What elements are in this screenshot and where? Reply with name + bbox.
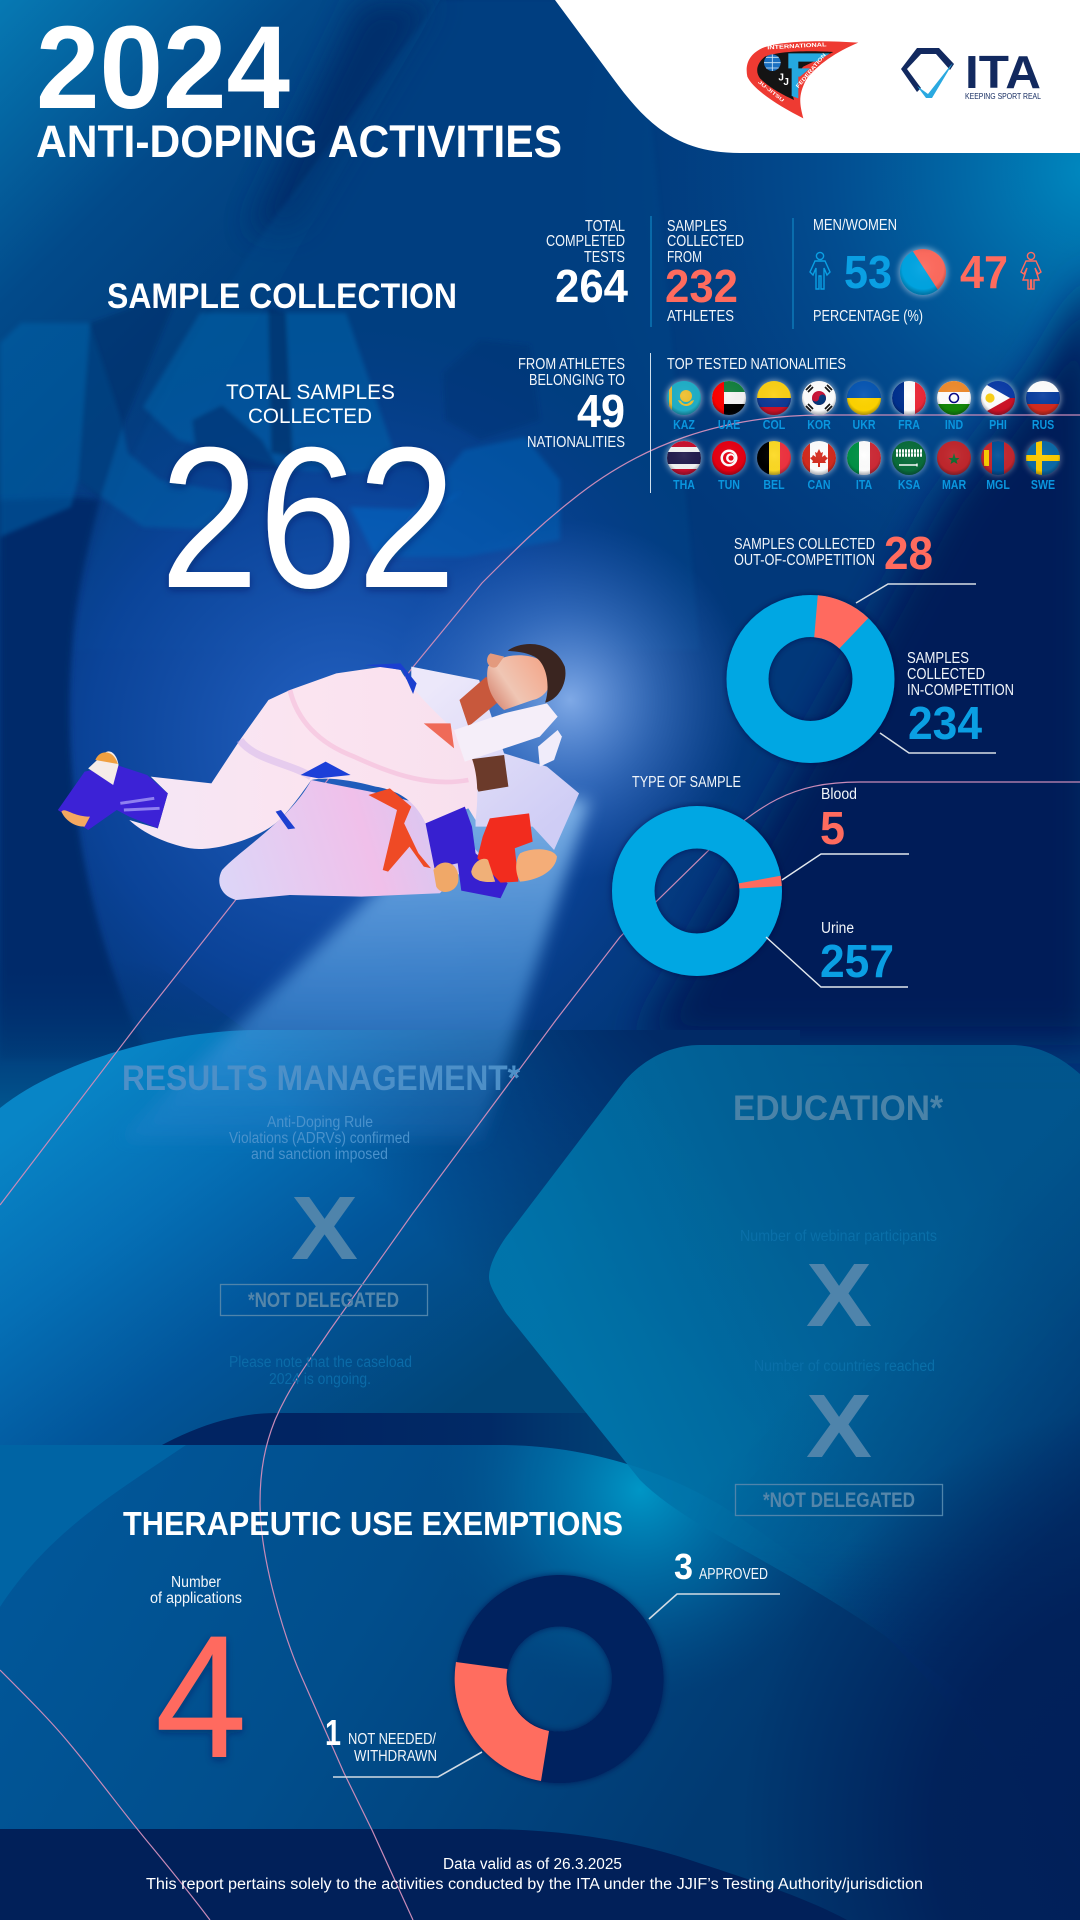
stat: nationalities: NATIONALITIES [527,434,625,451]
logo: JJIF: J [778,73,784,84]
chart: TUE outcomes donut [325,1546,780,1781]
footer note: This report pertains solely to the activities conducted by the ITA under the JJIF’s Testing Authority/jurisdiction [146,1876,923,1893]
icon: woman [1021,252,1041,289]
flag: TUN: TUN [718,478,740,492]
stat: total completed tests [546,218,628,312]
panel: results management background [0,1030,800,1500]
label: samples in competition [907,650,1014,749]
panel: results management: Anti-Doping Rule [267,1114,373,1131]
flag: MAR: MAR [942,478,967,492]
logo: JJIF: FEDERATION [795,52,828,90]
stat: men and women percentage [810,217,1041,325]
logo: JJIF: JU-JITSU [757,80,786,104]
footer note [146,1856,923,1893]
logo: ITA: ITA [965,46,1041,98]
panel: results management: X [291,1179,358,1279]
heading: sample collection: SAMPLE COLLECTION [107,277,457,316]
flag: COL: COL [763,418,785,432]
stat: nationalities: 49 [577,385,625,437]
left glow above results panel [0,960,260,1115]
flag: UAE [711,380,747,432]
panel: education: EDUCATION* [733,1089,943,1128]
panel: education background [489,1045,1080,1622]
logo: JJIF [747,41,858,118]
panel: education: *NOT DELEGATED [763,1489,915,1512]
label: samples out of competition: OUT-OF-COMPETITION [734,552,875,569]
stat: samples collected from athletes: ATHLETES [667,308,734,325]
stat: total completed tests: TOTAL [585,218,625,235]
head [487,655,551,710]
stat: number of applications: Number [171,1574,221,1591]
label: approved [649,1546,780,1619]
label: approved: APPROVED [699,1566,768,1583]
panel: education: X [806,1377,872,1477]
icon: man [810,252,830,289]
stat: nationalities: FROM ATHLETES [518,356,625,373]
flag: THA: THA [673,478,696,492]
flag: PHI [980,380,1016,432]
stat: total completed tests: TESTS [584,249,625,266]
decorative curved line one [0,415,1080,1205]
stat: samples collected from athletes: COLLECTED [667,233,744,250]
panel: results management: Violations (ADRVs) confirmed [229,1130,410,1147]
flag: BEL: BEL [763,478,785,492]
flag: PHI: PHI [989,418,1007,432]
label: not needed or withdrawn [325,1712,482,1777]
stat: total samples collected: TOTAL SAMPLES [226,380,395,404]
label: samples out of competition: 28 [884,527,933,579]
pie: men women split [898,242,948,297]
label: samples in competition: COLLECTED [907,666,985,683]
flag: KOR: KOR [807,418,831,432]
flag: KSA [891,440,927,492]
flag: UKR: UKR [853,418,876,432]
flag: RUS [1025,380,1061,432]
light beam below athlete [120,790,590,1140]
stat: men and women percentage: 47 [960,246,1008,298]
logo: JJIF: J [783,77,789,88]
stat: total samples collected: COLLECTED [248,404,372,428]
footer note: Data valid as of 26.3.2025 [443,1856,622,1873]
stat: total samples collected: 262 [160,405,456,630]
arm around head [454,703,558,762]
stat: men and women percentage: 53 [844,246,892,298]
logo: ITA [901,46,1041,101]
title: ANTI-DOPING ACTIVITIES [36,116,562,167]
heading: therapeutic use exemptions: THERAPEUTIC USE EXEMPTIONS [123,1505,623,1542]
flag: CAN: CAN [807,478,831,492]
panel: top tested nationalities: TOP TESTED NATIONALITIES [667,356,846,373]
flag: TUN [711,440,747,492]
stat: men and women percentage: PERCENTAGE (%) [813,308,923,325]
label: not needed or withdrawn: WITHDRAWN [354,1748,437,1765]
label: blood: 5 [820,802,845,854]
flag: UAE: UAE [718,418,740,432]
leader lines [766,854,909,987]
label: samples in competition: 234 [908,697,982,749]
flag: FRA: FRA [898,418,921,432]
blue sock and foot [426,807,508,898]
donut ring [633,827,782,955]
flag: ITA: ITA [856,478,873,492]
flag: KAZ: KAZ [673,418,695,432]
decorative curved line three [0,1670,210,1920]
background photo of judokas [0,290,560,557]
blue foot guard [58,765,168,830]
panel: education [733,1089,943,1516]
title: 2024 [36,2,290,134]
label: not needed or withdrawn: NOT NEEDED/ [348,1731,437,1748]
panel: footer background [0,1829,847,1920]
stat: men and women percentage: MEN/WOMEN [813,217,897,234]
panel: education: Number of countries reached [754,1358,935,1375]
flag: MAR [936,440,972,492]
flag: IND: IND [945,418,963,432]
stat: nationalities [518,356,625,451]
label: samples in competition: SAMPLES [907,650,969,667]
decorative curved line two [260,782,1080,1920]
stat: nationalities: BELONGING TO [529,372,625,389]
label: samples in competition: IN-COMPETITION [907,682,1014,699]
label: approved: 3 [674,1546,693,1587]
panel: education: Number of webinar participants [740,1228,937,1245]
label: not needed or withdrawn: 1 [325,1712,341,1753]
flag: MGL [980,440,1016,492]
blue sash and collar [365,663,417,694]
chart: type of sample donut: TYPE OF SAMPLE [632,774,741,791]
flag: KAZ [666,380,702,432]
label: urine: Urine [821,920,854,937]
label: samples out of competition [734,527,933,579]
label: blood: Blood [821,786,857,803]
panel: results management: RESULTS MANAGEMENT* [122,1059,520,1098]
flag: SWE: SWE [1031,478,1055,492]
title [36,2,562,167]
flag: BEL [756,440,792,492]
flag: COL [756,380,792,432]
stat: samples collected from athletes: FROM [667,249,702,266]
flag: KOR [801,380,837,432]
flag: FRA [891,380,927,432]
panel: therapeutic use exemptions background [0,1413,802,1832]
panel: top tested nationalities [666,356,1061,492]
label: blood [820,786,857,854]
panel: results management: 2024 is ongoing. [269,1371,371,1388]
chart: in and out of competition donut [734,527,1014,753]
panel: results management [122,1059,520,1388]
white logo corner [555,0,1080,153]
flag: ITA [846,440,882,492]
donut ring [455,1601,638,1781]
flag: KSA: KSA [898,478,921,492]
red belt [368,788,431,872]
label: samples out of competition: SAMPLES COLLECTED [734,536,875,553]
stat: number of applications: of applications [150,1590,242,1607]
panel: results management: *NOT DELEGATED [248,1289,399,1312]
stat: samples collected from athletes: SAMPLES [667,218,727,235]
panel: education: X [806,1246,872,1346]
logo: ITA: KEEPING SPORT REAL [965,92,1041,101]
stat: total completed tests: COMPLETED [546,233,625,250]
flag: UKR [846,380,882,432]
leader lines [856,584,996,753]
stat: samples collected from athletes: 232 [665,260,738,312]
red sock and foot [477,813,533,883]
stat: number of applications: 4 [155,1600,247,1795]
flag: MGL: MGL [986,478,1010,492]
dark lower right background [600,1300,1080,1920]
donut ring [748,595,874,742]
flag: IND [936,380,972,432]
stat: samples collected from athletes [665,218,744,325]
chart: type of sample donut [632,774,909,987]
panel: results management: Please note that the caseload [229,1354,412,1371]
logo: JJIF: INTERNATIONAL [767,42,827,51]
panel: results management: and sanction imposed [251,1146,388,1163]
stat: total completed tests: 264 [555,260,628,312]
label: urine: 257 [820,935,894,987]
flag: CAN [801,440,837,492]
back athlete gi and legs [411,667,579,850]
flag: THA [666,440,702,492]
flag: RUS: RUS [1032,418,1054,432]
illustration: two jiu-jitsu athletes [58,644,579,900]
flag: SWE [1025,440,1061,492]
